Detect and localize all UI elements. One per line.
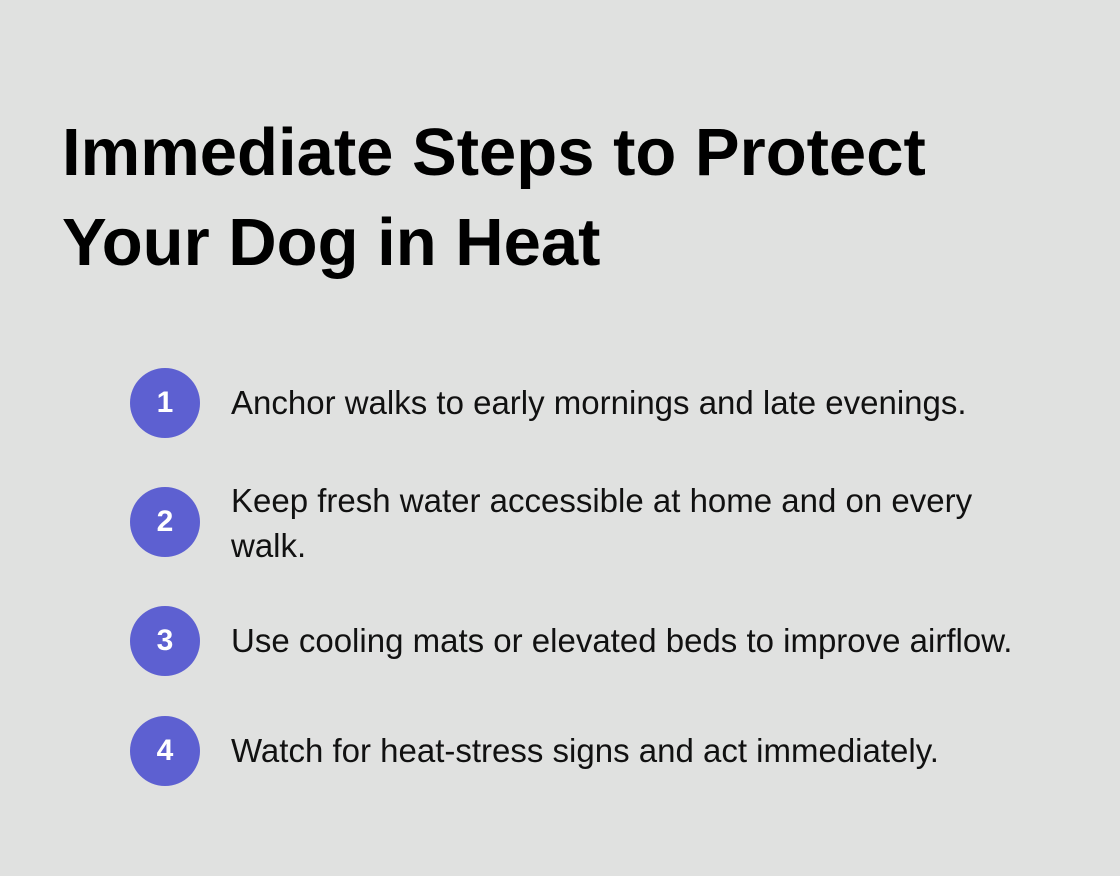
step 1: [130, 368, 967, 438]
icon: number 4: 4: [157, 734, 173, 767]
step 3: [130, 606, 1012, 676]
step 4: [130, 716, 939, 786]
icon: number 2: 2: [157, 505, 173, 538]
icon: number 3: 3: [157, 624, 173, 657]
title: [62, 115, 926, 280]
text: step 4: Watch for heat-stress signs and act immediately.: [231, 732, 939, 769]
title: Your Dog in Heat: [62, 205, 600, 280]
text: step 3: Use cooling mats or elevated beds to improve airflow.: [231, 622, 1012, 659]
text: step 1: Anchor walks to early mornings and late evenings.: [231, 384, 967, 421]
icon: number 4: [130, 716, 200, 786]
title: Immediate Steps to Protect: [62, 115, 926, 190]
step 2: [130, 482, 972, 564]
icon: number 3: [130, 606, 200, 676]
icon: number 1: 1: [157, 386, 173, 419]
text: step 2: Keep fresh water accessible at home and on every walk.: [231, 482, 972, 564]
icon: number 2: [130, 487, 200, 557]
icon: number 1: [130, 368, 200, 438]
